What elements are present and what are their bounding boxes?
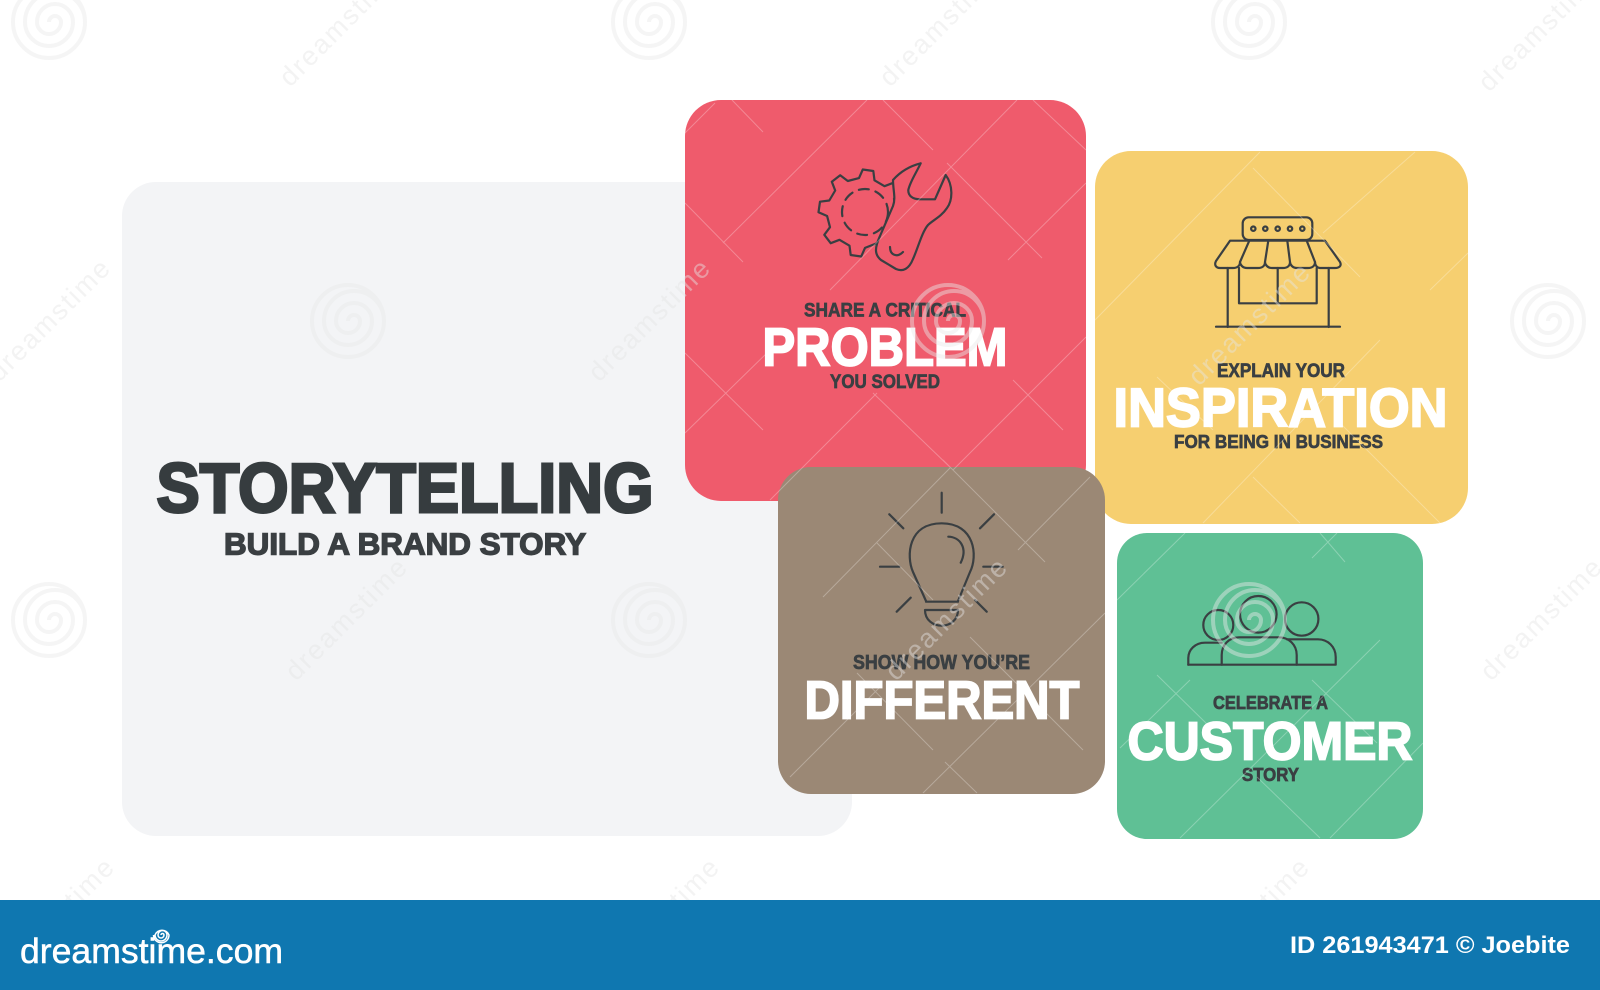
text: explain your: EXPLAIN YOUR bbox=[1217, 361, 1345, 382]
panel: different bbox=[778, 467, 1105, 794]
title: STORYTELLING bbox=[156, 449, 654, 527]
watermark overlay: dreamstime bbox=[279, 551, 414, 686]
subtitle: BUILD A BRAND STORY bbox=[224, 526, 586, 562]
text: for being in business: FOR BEING IN BUSINESS bbox=[1174, 431, 1383, 452]
heading: inspiration: INSPIRATION bbox=[1114, 376, 1448, 438]
watermark overlay: dreamstime bbox=[1181, 851, 1316, 986]
icon: logo spiral bbox=[154, 930, 169, 943]
heading: problem: PROBLEM bbox=[762, 318, 1008, 378]
icon: shop bbox=[1215, 217, 1341, 327]
text: story: STORY bbox=[1242, 765, 1299, 785]
watermark overlay: dreamstime bbox=[591, 851, 726, 986]
text: image id and author: ID 261943471 © Joebite bbox=[1290, 932, 1570, 959]
watermark overlay: dreamstime bbox=[879, 551, 1014, 686]
watermark overlay: dreamstime bbox=[582, 252, 717, 387]
icon: gear and wrench bbox=[818, 163, 951, 270]
icon: group of people bbox=[1188, 596, 1336, 665]
text: show how you're: SHOW HOW YOU’RE bbox=[853, 652, 1030, 674]
heading: different: DIFFERENT bbox=[804, 670, 1080, 730]
heading: customer: CUSTOMER bbox=[1128, 712, 1412, 772]
text: share a critical: SHARE A CRITICAL bbox=[804, 300, 966, 322]
panel: storytelling title bbox=[122, 182, 852, 836]
text: celebrate a: CELEBRATE A bbox=[1213, 693, 1328, 713]
icon: light bulb bbox=[880, 493, 1003, 626]
footer bar bbox=[0, 900, 1600, 990]
watermark overlay: dreamstime bbox=[1182, 256, 1317, 391]
logo: dreamstime.com: dreamstime.com bbox=[20, 932, 283, 971]
panel: problem bbox=[685, 100, 1086, 501]
panel: customer bbox=[1117, 533, 1423, 839]
panel: inspiration bbox=[1095, 151, 1468, 524]
text: you solved: YOU SOLVED bbox=[830, 372, 940, 393]
